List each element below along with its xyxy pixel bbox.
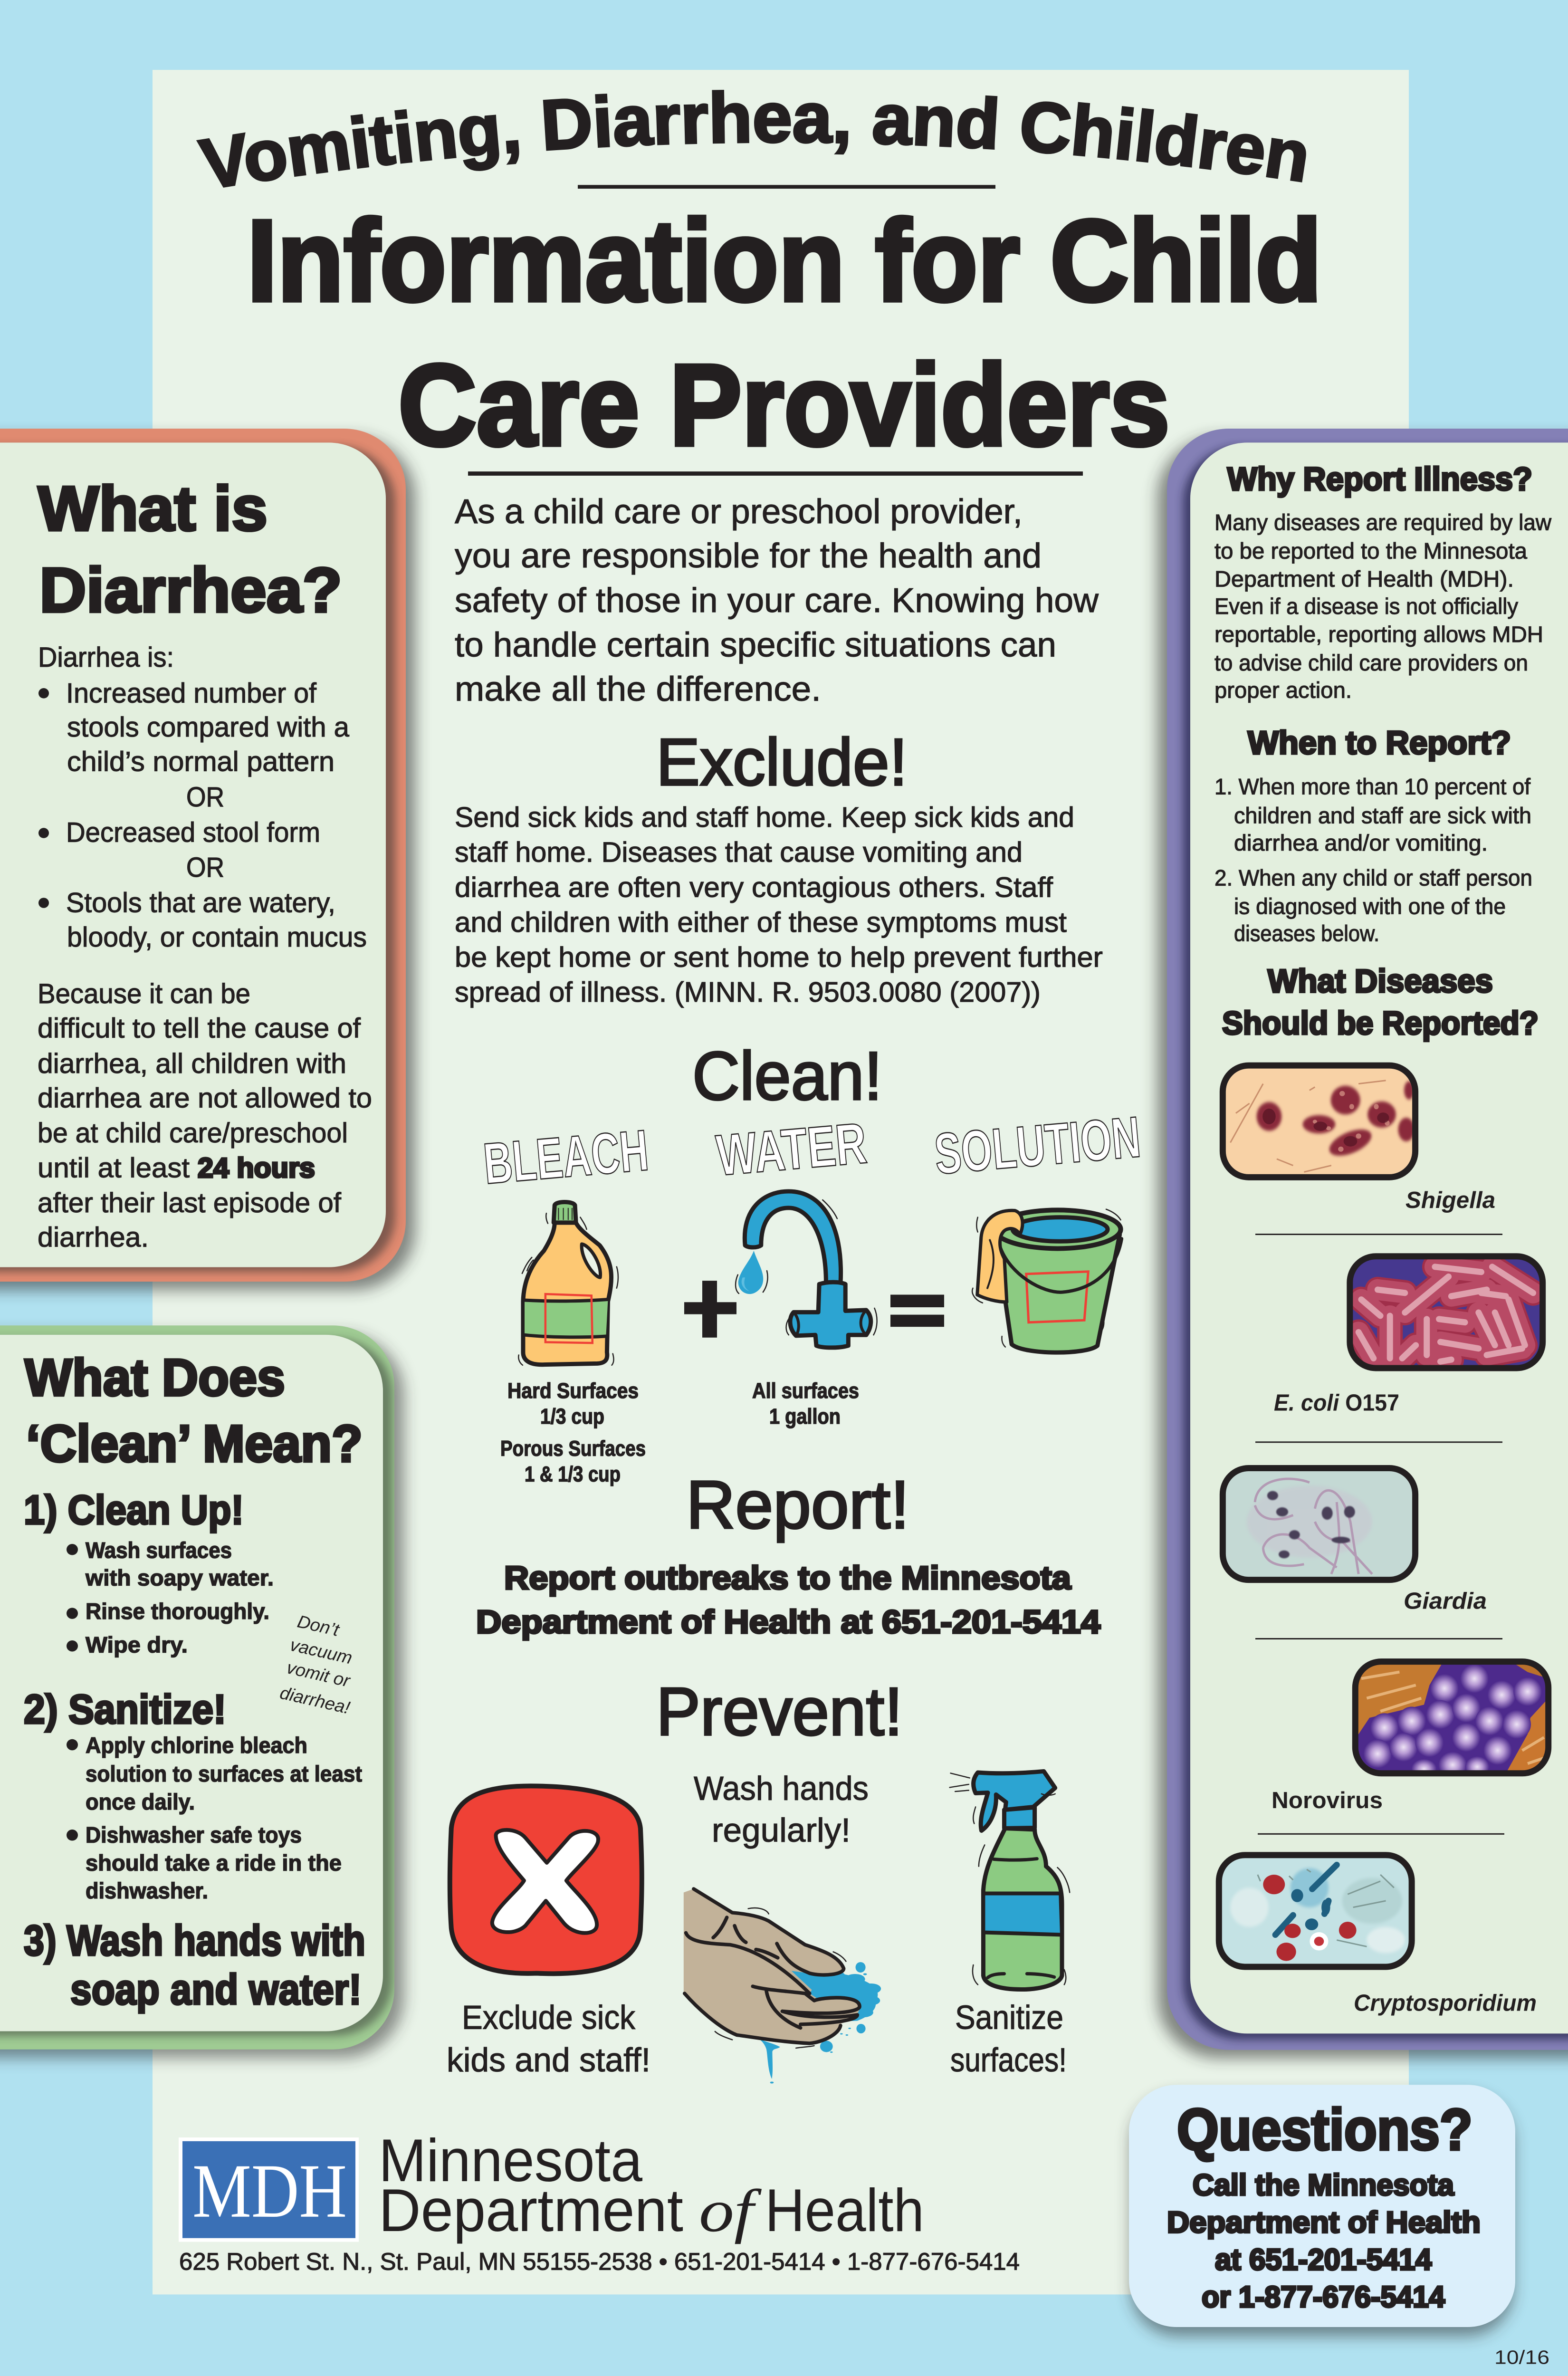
text: diarrhea definition list: Diarrhea is:: [38, 641, 174, 673]
label: solution: SOLUTION: [932, 1105, 1143, 1187]
text: diarrhea definition list: Decreased stool form: [66, 816, 320, 848]
icon: washing hands: [684, 1889, 881, 2083]
text: why report: Many diseases are required by law: [1214, 510, 1552, 536]
heading: why report illness: Why Report Illness?: [1227, 460, 1532, 497]
text: water amounts: [752, 1379, 859, 1428]
callout: questions: Department of Health: [1167, 2206, 1481, 2239]
step 2: sanitize: Dishwasher safe toys: [86, 1823, 302, 1848]
text: when to report list: is diagnosed with one of the: [1234, 894, 1506, 919]
text: why report: Even if a disease is not officially: [1214, 594, 1518, 619]
heading: what diseases: [1222, 963, 1539, 1041]
heading: report: Report!: [686, 1466, 909, 1542]
heading: what diseases: Should be Reported?: [1222, 1005, 1539, 1041]
text: intro: [455, 492, 1099, 708]
image: cryptosporidium micrograph: [1219, 1855, 1412, 1967]
heading: exclude: Exclude!: [656, 725, 908, 800]
text: exclusion rule: diarrhea, all children with: [38, 1047, 346, 1079]
note: don't vacuum: vomit or: [285, 1657, 353, 1691]
text: sanitize surfaces: surfaces!: [950, 2041, 1067, 2079]
title: information for child care providers: [247, 197, 1322, 470]
text: intro: make all the difference.: [455, 670, 821, 708]
text: exclusion rule: after their last episode of: [38, 1187, 341, 1218]
step 2: sanitize: solution to surfaces at least: [86, 1762, 362, 1787]
callout: questions: [1129, 2085, 1515, 2337]
callout: questions: or 1-877-676-5414: [1202, 2280, 1445, 2314]
text: diarrhea definition list: [38, 641, 367, 953]
text: bleach amounts: 1 & 1/3 cup: [525, 1462, 621, 1486]
image: giardia micrograph: [1223, 1468, 1415, 1580]
text: wash hands: Wash hands: [694, 1770, 869, 1807]
title: information for child care providers: Information for Child: [247, 197, 1322, 326]
text: when to report list: children and staff are sick with: [1234, 804, 1531, 828]
text: diarrhea definition list: Increased number of: [66, 677, 316, 709]
callout: questions: at 651-201-5414: [1215, 2243, 1432, 2276]
image: norovirus micrograph: [1355, 1662, 1549, 1779]
label: cryptosporidium: Cryptosporidium: [1354, 1990, 1537, 2016]
text: why report: [1214, 510, 1552, 703]
text: exclusion rule: until at least: [38, 1152, 190, 1183]
icon: equals sign: [890, 1295, 944, 1327]
step 2: sanitize: Apply chlorine bleach: [86, 1734, 307, 1758]
step 1: clean up: [24, 1487, 274, 1657]
icon: plus sign: [684, 1281, 736, 1338]
step 2: sanitize: dishwasher.: [86, 1879, 208, 1904]
step 2: sanitize: 2) Sanitize!: [24, 1686, 226, 1732]
logo: department name: Minnesota: [379, 2127, 642, 2194]
note: don't vacuum: diarrhea!: [278, 1683, 352, 1718]
text: exclusion rule: difficult to tell the cause of: [38, 1012, 361, 1044]
label: e. coli o157: E. coli O157: [1274, 1390, 1399, 1416]
callout: questions: Questions?: [1177, 2098, 1472, 2162]
text: wash hands: [694, 1770, 869, 1849]
step 1: clean up: Wash surfaces: [86, 1538, 232, 1563]
icon: bucket with cloth: [972, 1209, 1122, 1352]
text: why report: reportable, reporting allows MDH: [1214, 622, 1543, 647]
text: exclusion rule: Because it can be: [38, 977, 250, 1009]
text: intro: to handle certain specific situations can: [455, 625, 1056, 664]
step 1: clean up: Wipe dry.: [86, 1633, 188, 1657]
logo: department name: Health: [765, 2176, 924, 2244]
step 1: clean up: Rinse thoroughly.: [86, 1599, 269, 1624]
heading: what does clean mean: What Does: [25, 1348, 285, 1407]
logo: department name: of: [699, 2177, 762, 2244]
heading: when to report: When to Report?: [1248, 724, 1511, 761]
text: exclusion rule: 24 hours: [198, 1152, 315, 1183]
text: bleach amounts: Hard Surfaces: [507, 1379, 639, 1403]
text: intro: As a child care or preschool provider,: [455, 492, 1023, 531]
label: giardia: Giardia: [1404, 1588, 1487, 1614]
text: bleach amounts: Porous Surfaces: [500, 1437, 646, 1461]
text: bleach amounts: 1/3 cup: [540, 1404, 604, 1428]
icon: spray bottle: [950, 1771, 1070, 1990]
text: diarrhea definition list: child’s normal pattern: [67, 746, 335, 777]
logo: mdh square: MDH: [192, 2148, 347, 2233]
text: sanitize surfaces: Sanitize: [955, 1999, 1063, 2036]
text: exclude body: staff home. Diseases that cause vomiting and: [455, 836, 1023, 868]
text: intro: you are responsible for the health and: [455, 537, 1042, 575]
title: arched subtitle: Vomiting, Diarrhea, and Children: [195, 78, 1315, 204]
text: diarrhea definition list: stools compared with a: [67, 711, 350, 743]
text: when to report list: 2. When any child or staff person: [1214, 866, 1532, 891]
text: address: 625 Robert St. N., St. Paul, MN 55155-2538 • 651-201-5414 • 1-877-676-5414: [179, 2248, 1020, 2275]
text: exclusion rule: [38, 977, 372, 1253]
icon: red x: [450, 1786, 642, 1974]
panel: what is diarrhea: [0, 429, 415, 1290]
icon: bleach bottle: [518, 1202, 618, 1365]
text: intro: safety of those in your care. Knowing how: [455, 581, 1099, 620]
heading: what does clean mean: [25, 1348, 363, 1473]
text: exclude sick kids: [447, 1999, 650, 2079]
step 3: wash hands: [24, 1917, 365, 2013]
text: exclude sick kids: kids and staff!: [447, 2041, 650, 2079]
text: exclude body: be kept home or sent home to help prevent further: [455, 941, 1103, 973]
step 2: sanitize: should take a ride in the: [86, 1851, 342, 1876]
text: why report: proper action.: [1214, 678, 1352, 703]
note: don't vacuum: vacuum: [288, 1635, 354, 1668]
image: e. coli micrograph: [1350, 1256, 1543, 1368]
title: information for child care providers: Care Providers: [398, 341, 1170, 470]
main panel: [153, 70, 1409, 2294]
label: shigella: Shigella: [1405, 1188, 1495, 1213]
logo: department name: [379, 2127, 924, 2244]
text: why report: Department of Health (MDH).: [1214, 567, 1514, 592]
label: bleach: BLEACH: [481, 1118, 651, 1197]
text: when to report list: diarrhea and/or vomiting.: [1234, 831, 1488, 856]
label: norovirus: Norovirus: [1272, 1787, 1383, 1813]
text: report outbreaks: Department of Health at 651-201-5414: [476, 1603, 1100, 1640]
heading: what is diarrhea: [38, 474, 342, 625]
text: exclude body: spread of illness. (MINN. R. 9503.0080 (2007)): [455, 976, 1041, 1008]
step 3: wash hands: soap and water!: [70, 1966, 362, 2013]
logo: department name: Department: [379, 2176, 683, 2244]
text: water amounts: 1 gallon: [769, 1404, 841, 1428]
text: exclusion rule: diarrhea are not allowed to: [38, 1082, 372, 1113]
text: why report: to advise child care providers on: [1214, 651, 1528, 676]
text: exclude body: [455, 801, 1103, 1008]
text: diarrhea definition list: OR: [186, 781, 224, 813]
text: diarrhea definition list: OR: [186, 852, 224, 883]
text: diarrhea definition list: bloody, or contain mucus: [67, 921, 367, 953]
text: exclude body: diarrhea are often very contagious others. Staff: [455, 871, 1053, 903]
text: sanitize surfaces: [950, 1999, 1067, 2079]
step 1: clean up: 1) Clean Up!: [24, 1487, 244, 1533]
text: wash hands: regularly!: [712, 1811, 851, 1849]
step 3: wash hands: 3) Wash hands with: [24, 1917, 365, 1965]
icon: faucet: [736, 1191, 877, 1348]
image: shigella micrograph: [1223, 1065, 1415, 1177]
heading: what is diarrhea: Diarrhea?: [39, 555, 342, 625]
heading: what is diarrhea: What is: [38, 474, 268, 544]
step 2: sanitize: once daily.: [86, 1790, 195, 1815]
text: exclude body: and children with either of these symptoms must: [455, 906, 1067, 938]
panel: what does clean mean: [0, 1325, 404, 2058]
step 1: clean up: with soapy water.: [85, 1566, 274, 1590]
text: when to report list: diseases below.: [1234, 921, 1379, 946]
note: don't vacuum: Don’t: [296, 1611, 342, 1640]
step 2: sanitize: [24, 1686, 362, 1904]
text: report outbreaks: Report outbreaks to the Minnesota: [504, 1560, 1071, 1596]
text: diarrhea definition list: Stools that are watery,: [66, 887, 335, 918]
heading: clean: Clean!: [692, 1037, 882, 1114]
text: water amounts: All surfaces: [752, 1379, 859, 1403]
panel: report illness: [1157, 429, 1568, 2058]
text: exclude body: Send sick kids and staff home. Keep sick kids and: [455, 801, 1074, 833]
text: exclusion rule: diarrhea.: [38, 1221, 149, 1253]
text: exclude sick kids: Exclude sick: [462, 1999, 635, 2036]
text: bleach amounts: [500, 1379, 646, 1486]
text: why report: to be reported to the Minnesota: [1214, 539, 1528, 564]
text: revision date: 10/16: [1494, 2346, 1549, 2368]
label: water: WATER: [714, 1111, 869, 1188]
text: exclusion rule: be at child care/preschool: [38, 1117, 348, 1149]
text: report outbreaks: [476, 1560, 1100, 1640]
heading: what does clean mean: ‘Clean’ Mean?: [26, 1414, 363, 1473]
callout: questions: Call the Minnesota: [1193, 2169, 1454, 2202]
text: when to report list: [1214, 775, 1532, 946]
note: don't vacuum: [278, 1611, 354, 1718]
text: when to report list: 1. When more than 10 percent of: [1214, 775, 1531, 799]
heading: what diseases: What Diseases: [1268, 963, 1493, 999]
heading: prevent: Prevent!: [656, 1673, 903, 1750]
